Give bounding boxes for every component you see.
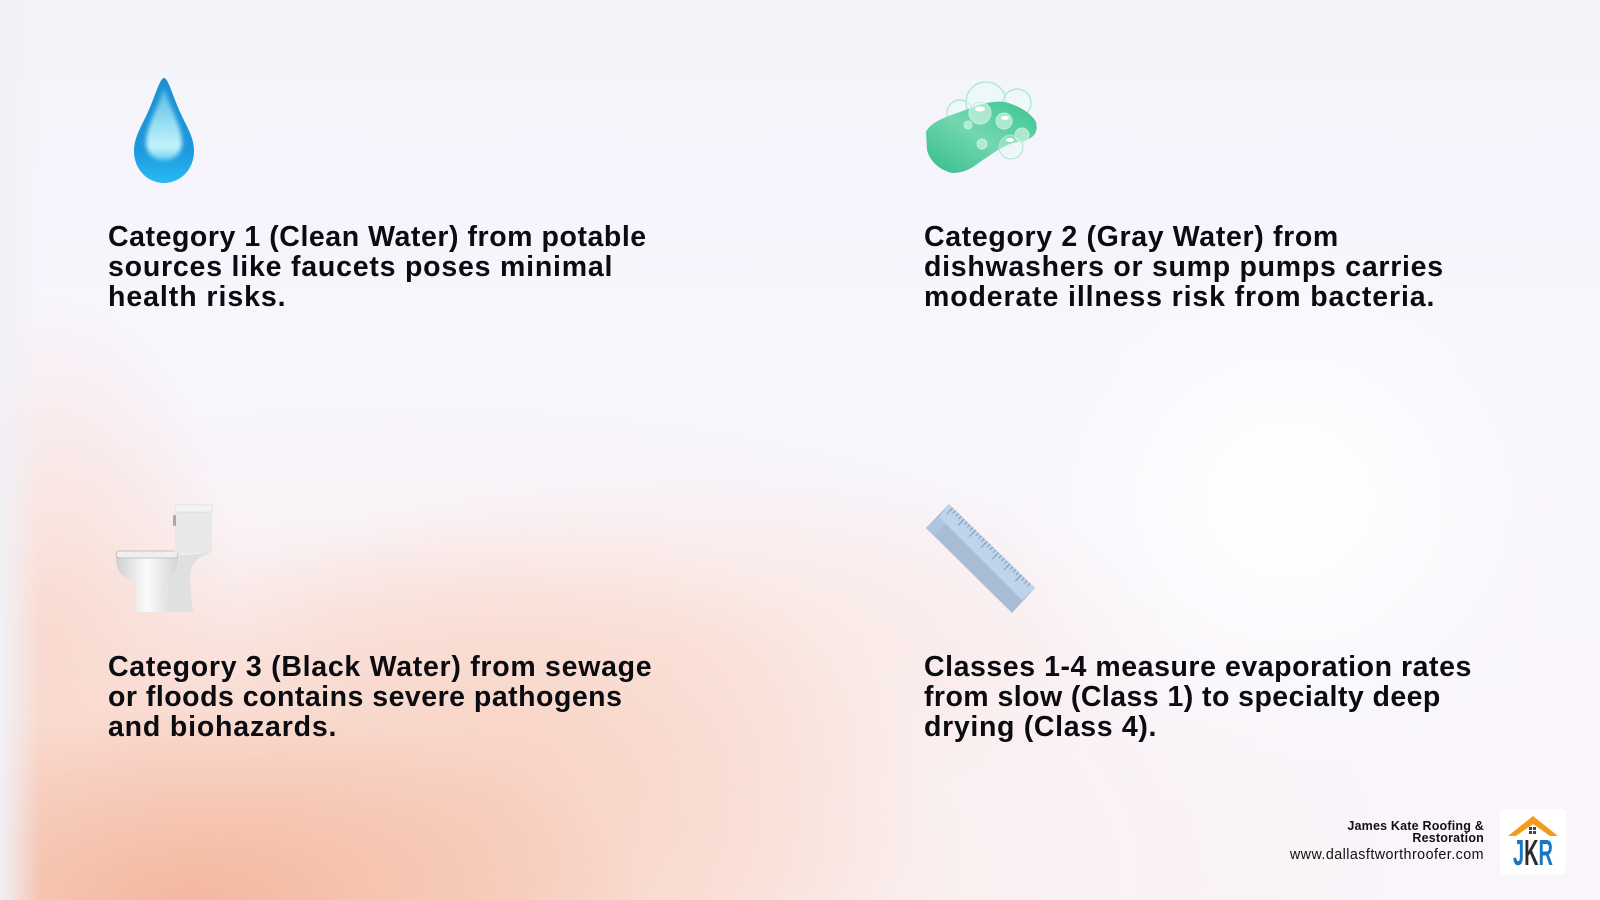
text: classes 1-4: drying (Class 4).: [924, 711, 1157, 743]
logo: JKR house: JKR: [1513, 832, 1553, 873]
text: category 2: Category 2 (Gray Water) from: [924, 221, 1339, 253]
text: category 2: [924, 221, 1444, 313]
text: category 3: Category 3 (Black Water) from sewage: [108, 651, 652, 683]
text: category 2: dishwashers or sump pumps carries: [924, 251, 1444, 283]
text: category 1: health risks.: [108, 281, 287, 313]
text: classes 1-4: from slow (Class 1) to specialty deep: [924, 681, 1441, 713]
text: category 3: [108, 651, 652, 743]
footer: company name and website: [1290, 819, 1484, 863]
text: category 1: Category 1 (Clean Water) from potable: [108, 221, 647, 253]
icon: toilet: [116, 504, 212, 612]
footer: company name and website: James Kate Roofing &: [1347, 819, 1484, 833]
icon: soap with bubbles: [926, 81, 1037, 173]
text: category 1: sources like faucets poses minimal: [108, 251, 613, 283]
text: category 1: [108, 221, 647, 313]
logo: JKR house: [1500, 809, 1566, 875]
text: category 3: or floods contains severe pathogens: [108, 681, 622, 713]
footer: company name and website: Restoration: [1412, 831, 1484, 845]
icon: ruler: [926, 504, 1035, 613]
footer: company name and website: www.dallasftworthroofer.com: [1290, 847, 1484, 863]
text: classes 1-4: Classes 1-4 measure evaporation rates: [924, 651, 1472, 683]
text: classes 1-4: [924, 651, 1472, 743]
icon: water drop: [134, 78, 194, 183]
text: category 2: moderate illness risk from bacteria.: [924, 281, 1435, 313]
text: category 3: and biohazards.: [108, 711, 337, 743]
